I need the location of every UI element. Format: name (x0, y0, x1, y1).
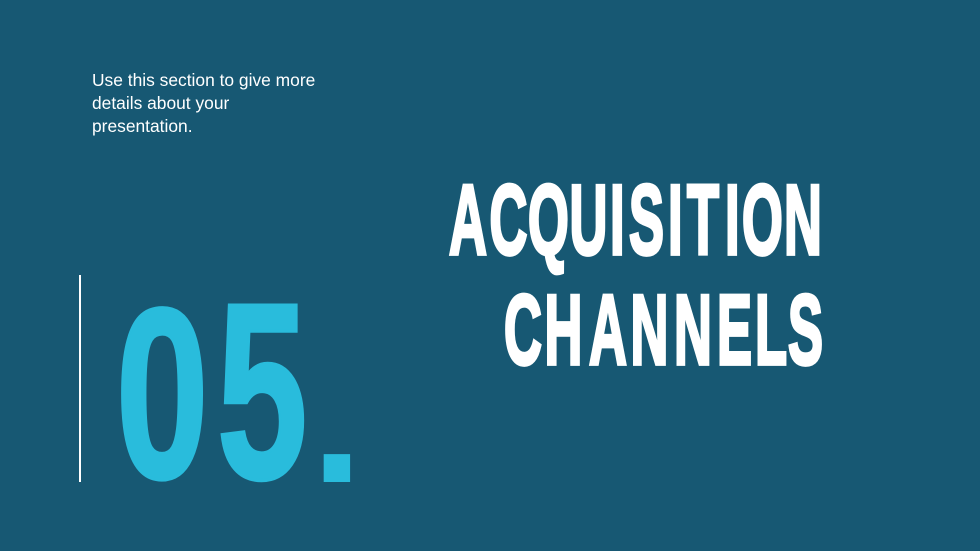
text block: section description: Use this section to give more (92, 70, 315, 90)
text block: section description: presentation. (92, 116, 193, 136)
title (449, 164, 823, 385)
section number: . (311, 313, 363, 522)
text block: section description: details about your (92, 93, 229, 113)
text block: section description (92, 70, 315, 136)
title: CHANNELS (504, 274, 823, 385)
section number: 5 (217, 250, 308, 531)
section number (116, 250, 363, 531)
section number: 0 (116, 258, 209, 530)
title: ACQUISITION (449, 164, 822, 275)
vertical divider line (79, 275, 81, 482)
